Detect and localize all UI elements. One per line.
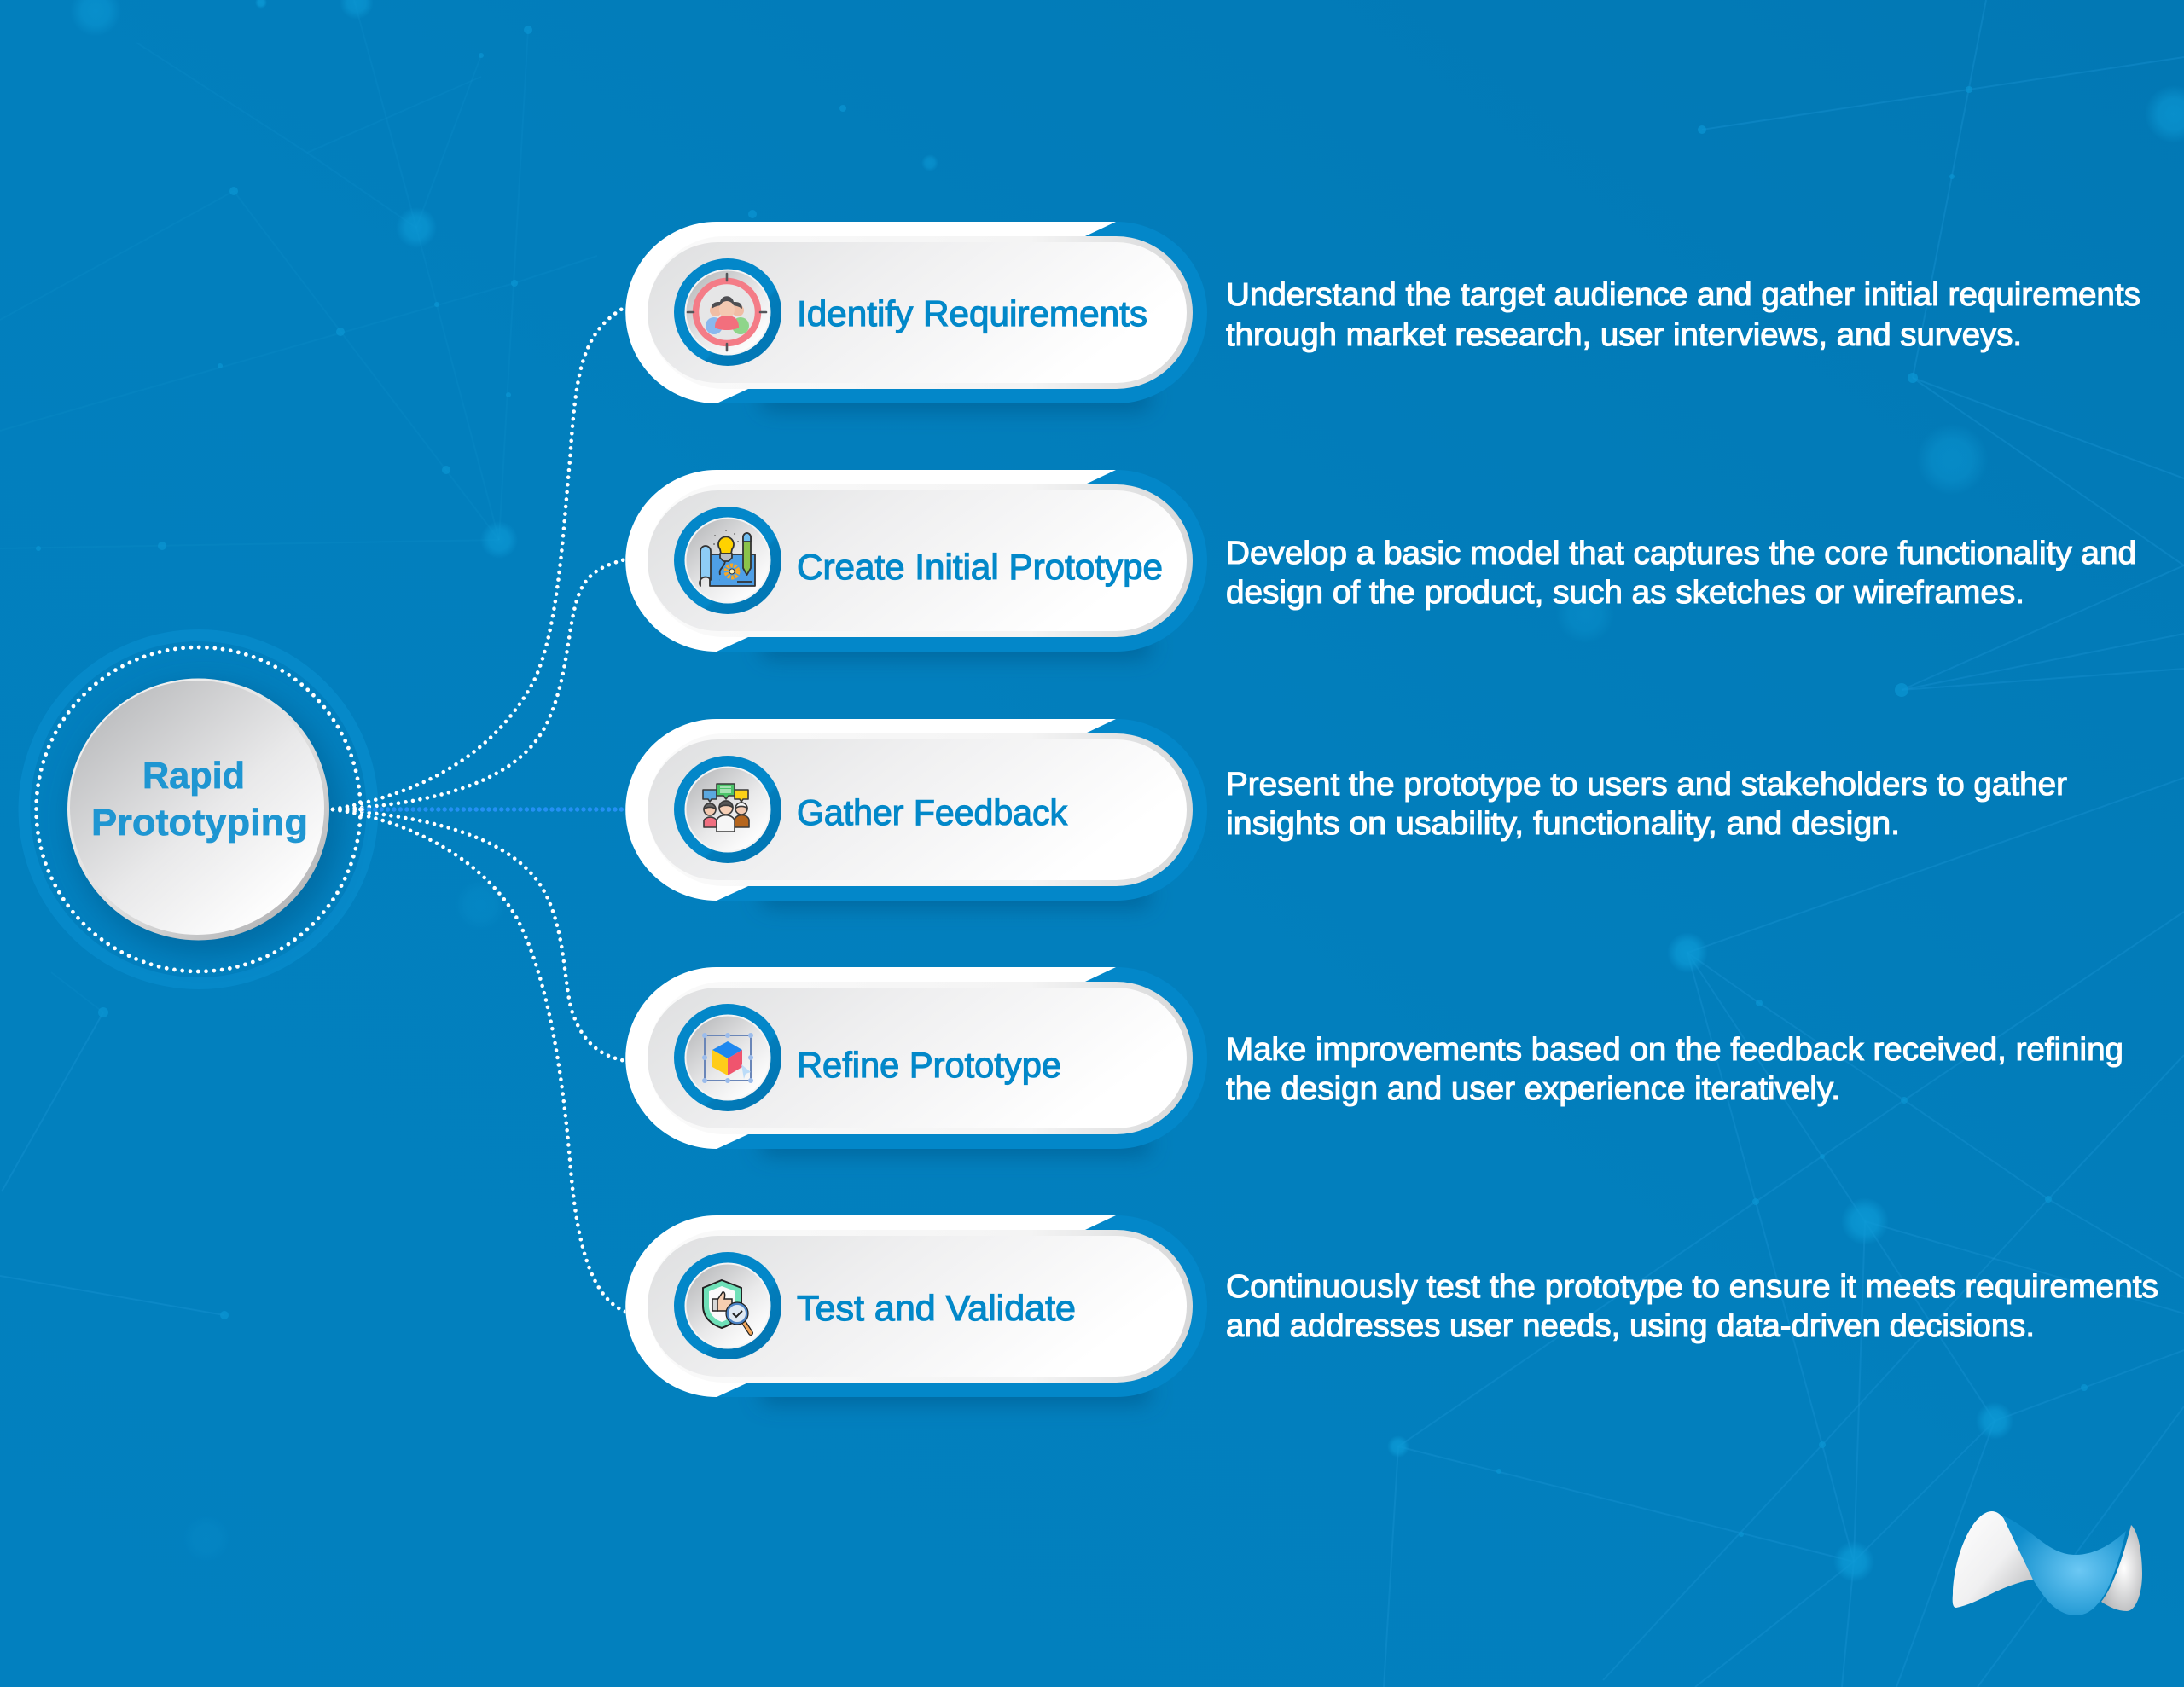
description: Create Initial Prototype: Develop a basic model that captures the core functionality and <box>1226 536 2136 571</box>
step 4: Refine Prototype <box>625 967 1207 1157</box>
central node label: Prototyping <box>91 802 308 844</box>
icon: cube in selection frame <box>702 1033 753 1083</box>
central node label <box>91 755 308 844</box>
icon: blueprint, bulb and pencil <box>700 530 755 586</box>
step title: Test and Validate <box>797 1288 1076 1328</box>
description: Refine Prototype: the design and user experience iteratively. <box>1226 1071 1840 1107</box>
description: Create Initial Prototype <box>1226 536 2136 611</box>
step title: Identify Requirements <box>797 293 1147 333</box>
description: Test and Validate: Continuously test the prototype to ensure it meets requirements <box>1226 1269 2158 1305</box>
central node label: Rapid <box>142 755 245 797</box>
step 1: Identify Requirements <box>625 222 1207 411</box>
description: Identify Requirements: through market research, user interviews, and surveys. <box>1226 317 2022 353</box>
description: Gather Feedback: Present the prototype to users and stakeholders to gather <box>1226 767 2067 803</box>
description: Gather Feedback: insights on usability, functionality, and design. <box>1226 806 1900 842</box>
step 3: Gather Feedback <box>625 719 1207 908</box>
icon: target with people <box>688 274 766 351</box>
central node: Rapid Prototyping <box>24 635 372 983</box>
description: Refine Prototype <box>1226 1032 2123 1107</box>
description: Identify Requirements: Understand the target audience and gather initial requirements <box>1226 277 2140 313</box>
dotted connectors from centre to the five steps <box>333 307 625 1312</box>
description: Create Initial Prototype: design of the product, such as sketches or wireframes. <box>1226 575 2024 611</box>
description: Identify Requirements <box>1226 277 2140 353</box>
icon: shield with magnifier <box>703 1280 751 1333</box>
icon: people with speech bubbles <box>703 784 749 832</box>
description: Refine Prototype: Make improvements based on the feedback received, refining <box>1226 1032 2123 1068</box>
step title: Gather Feedback <box>797 792 1068 832</box>
step title: Create Initial Prototype <box>797 547 1163 587</box>
step 2: Create Initial Prototype <box>625 470 1207 659</box>
description: Test and Validate <box>1226 1269 2158 1344</box>
description: Test and Validate: and addresses user needs, using data-driven decisions. <box>1226 1308 2035 1344</box>
step title: Refine Prototype <box>797 1045 1061 1085</box>
description: Gather Feedback <box>1226 767 2067 842</box>
step 5: Test and Validate <box>625 1215 1207 1405</box>
logo <box>1953 1511 2142 1615</box>
